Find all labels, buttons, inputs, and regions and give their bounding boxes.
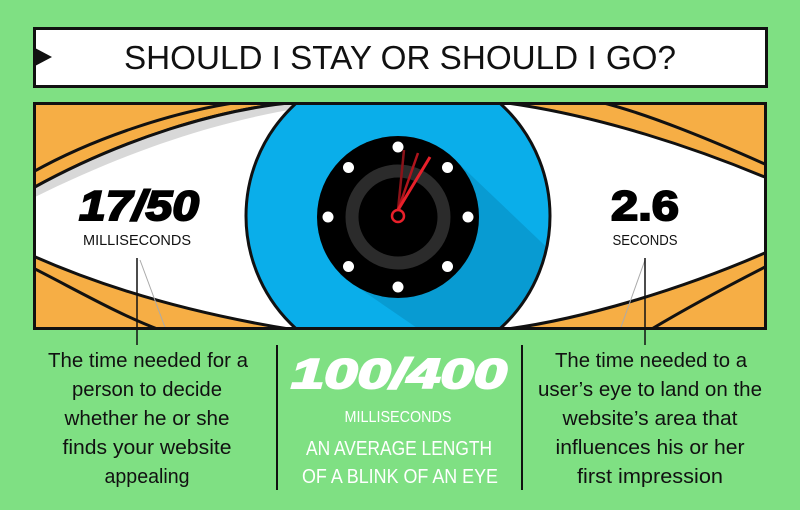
- icon: clock: [317, 136, 479, 298]
- text block: left description: whether he or she: [63, 408, 229, 430]
- text block: right description: user’s eye to land on the: [538, 379, 762, 401]
- connector lines: [137, 258, 645, 490]
- title banner: [34, 28, 766, 86]
- stat: 17/50 milliseconds: [79, 182, 199, 249]
- text block: center stat: [291, 350, 507, 488]
- text block: right description: first impression: [577, 466, 723, 488]
- title banner: SHOULD I STAY OR SHOULD I GO?: [124, 39, 676, 76]
- text block: center stat: MILLISECONDS: [344, 409, 452, 426]
- panel: eye illustration: [33, 102, 767, 330]
- text block: left description: finds your website: [62, 437, 232, 459]
- text block: center stat: 100/400: [291, 350, 507, 397]
- text block: left description: [48, 350, 249, 488]
- text block: right description: influences his or her: [556, 437, 745, 459]
- text block: right description: website’s area that: [561, 408, 738, 430]
- text block: left description: The time needed for a: [48, 350, 249, 372]
- text block: center stat: OF A BLINK OF AN EYE: [302, 466, 498, 488]
- text block: center stat: AN AVERAGE LENGTH: [306, 438, 492, 460]
- stat: 2.6 seconds: 2.6: [611, 182, 679, 229]
- stat: 2.6 seconds: [611, 182, 679, 249]
- text block: right description: The time needed to a: [555, 350, 748, 372]
- stat: 17/50 milliseconds: 17/50: [79, 182, 199, 229]
- stat: 2.6 seconds: SECONDS: [612, 232, 678, 249]
- stat: 17/50 milliseconds: MILLISECONDS: [83, 232, 191, 249]
- text block: left description: person to decide: [72, 379, 222, 401]
- text block: right description: [538, 350, 762, 488]
- text block: left description: appealing: [104, 466, 190, 488]
